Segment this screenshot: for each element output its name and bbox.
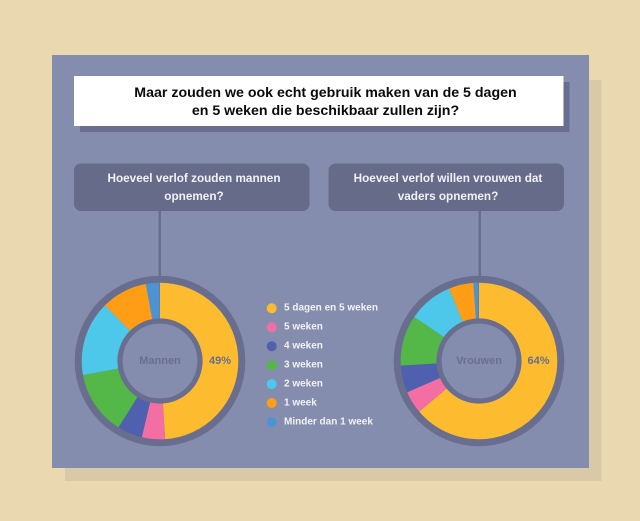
donut chart: mannen: Mannen <box>139 355 181 367</box>
title: en 5 weken die beschikbaar zullen zijn? <box>192 103 459 119</box>
donut chart: mannen: 49% <box>209 355 231 367</box>
legend: Minder dan 1 week <box>284 416 373 428</box>
title: Maar zouden we ook echt gebruik maken van de 5 dagen <box>134 85 517 101</box>
legend <box>267 302 378 428</box>
question box: vrouwen: vaders opnemen? <box>398 190 498 203</box>
question box: mannen: opnemen? <box>164 190 224 203</box>
legend: 2 weken <box>284 378 323 390</box>
legend: 5 dagen en 5 weken <box>284 302 378 314</box>
legend: 3 weken <box>284 360 323 370</box>
donut chart: vrouwen <box>394 276 564 446</box>
donut chart: vrouwen: Vrouwen <box>456 355 502 367</box>
legend: 1 week <box>284 398 317 408</box>
title <box>74 76 570 132</box>
donut chart: mannen <box>75 276 245 446</box>
question box: mannen <box>74 164 310 278</box>
question box: vrouwen <box>328 164 564 278</box>
donut chart: vrouwen: 64% <box>527 355 550 367</box>
legend: 5 weken <box>284 322 323 332</box>
question box: mannen: Hoeveel verlof zouden mannen <box>107 172 281 185</box>
main panel <box>52 55 589 468</box>
question box: vrouwen: Hoeveel verlof willen vrouwen dat <box>354 172 542 185</box>
legend: 4 weken <box>284 340 323 352</box>
